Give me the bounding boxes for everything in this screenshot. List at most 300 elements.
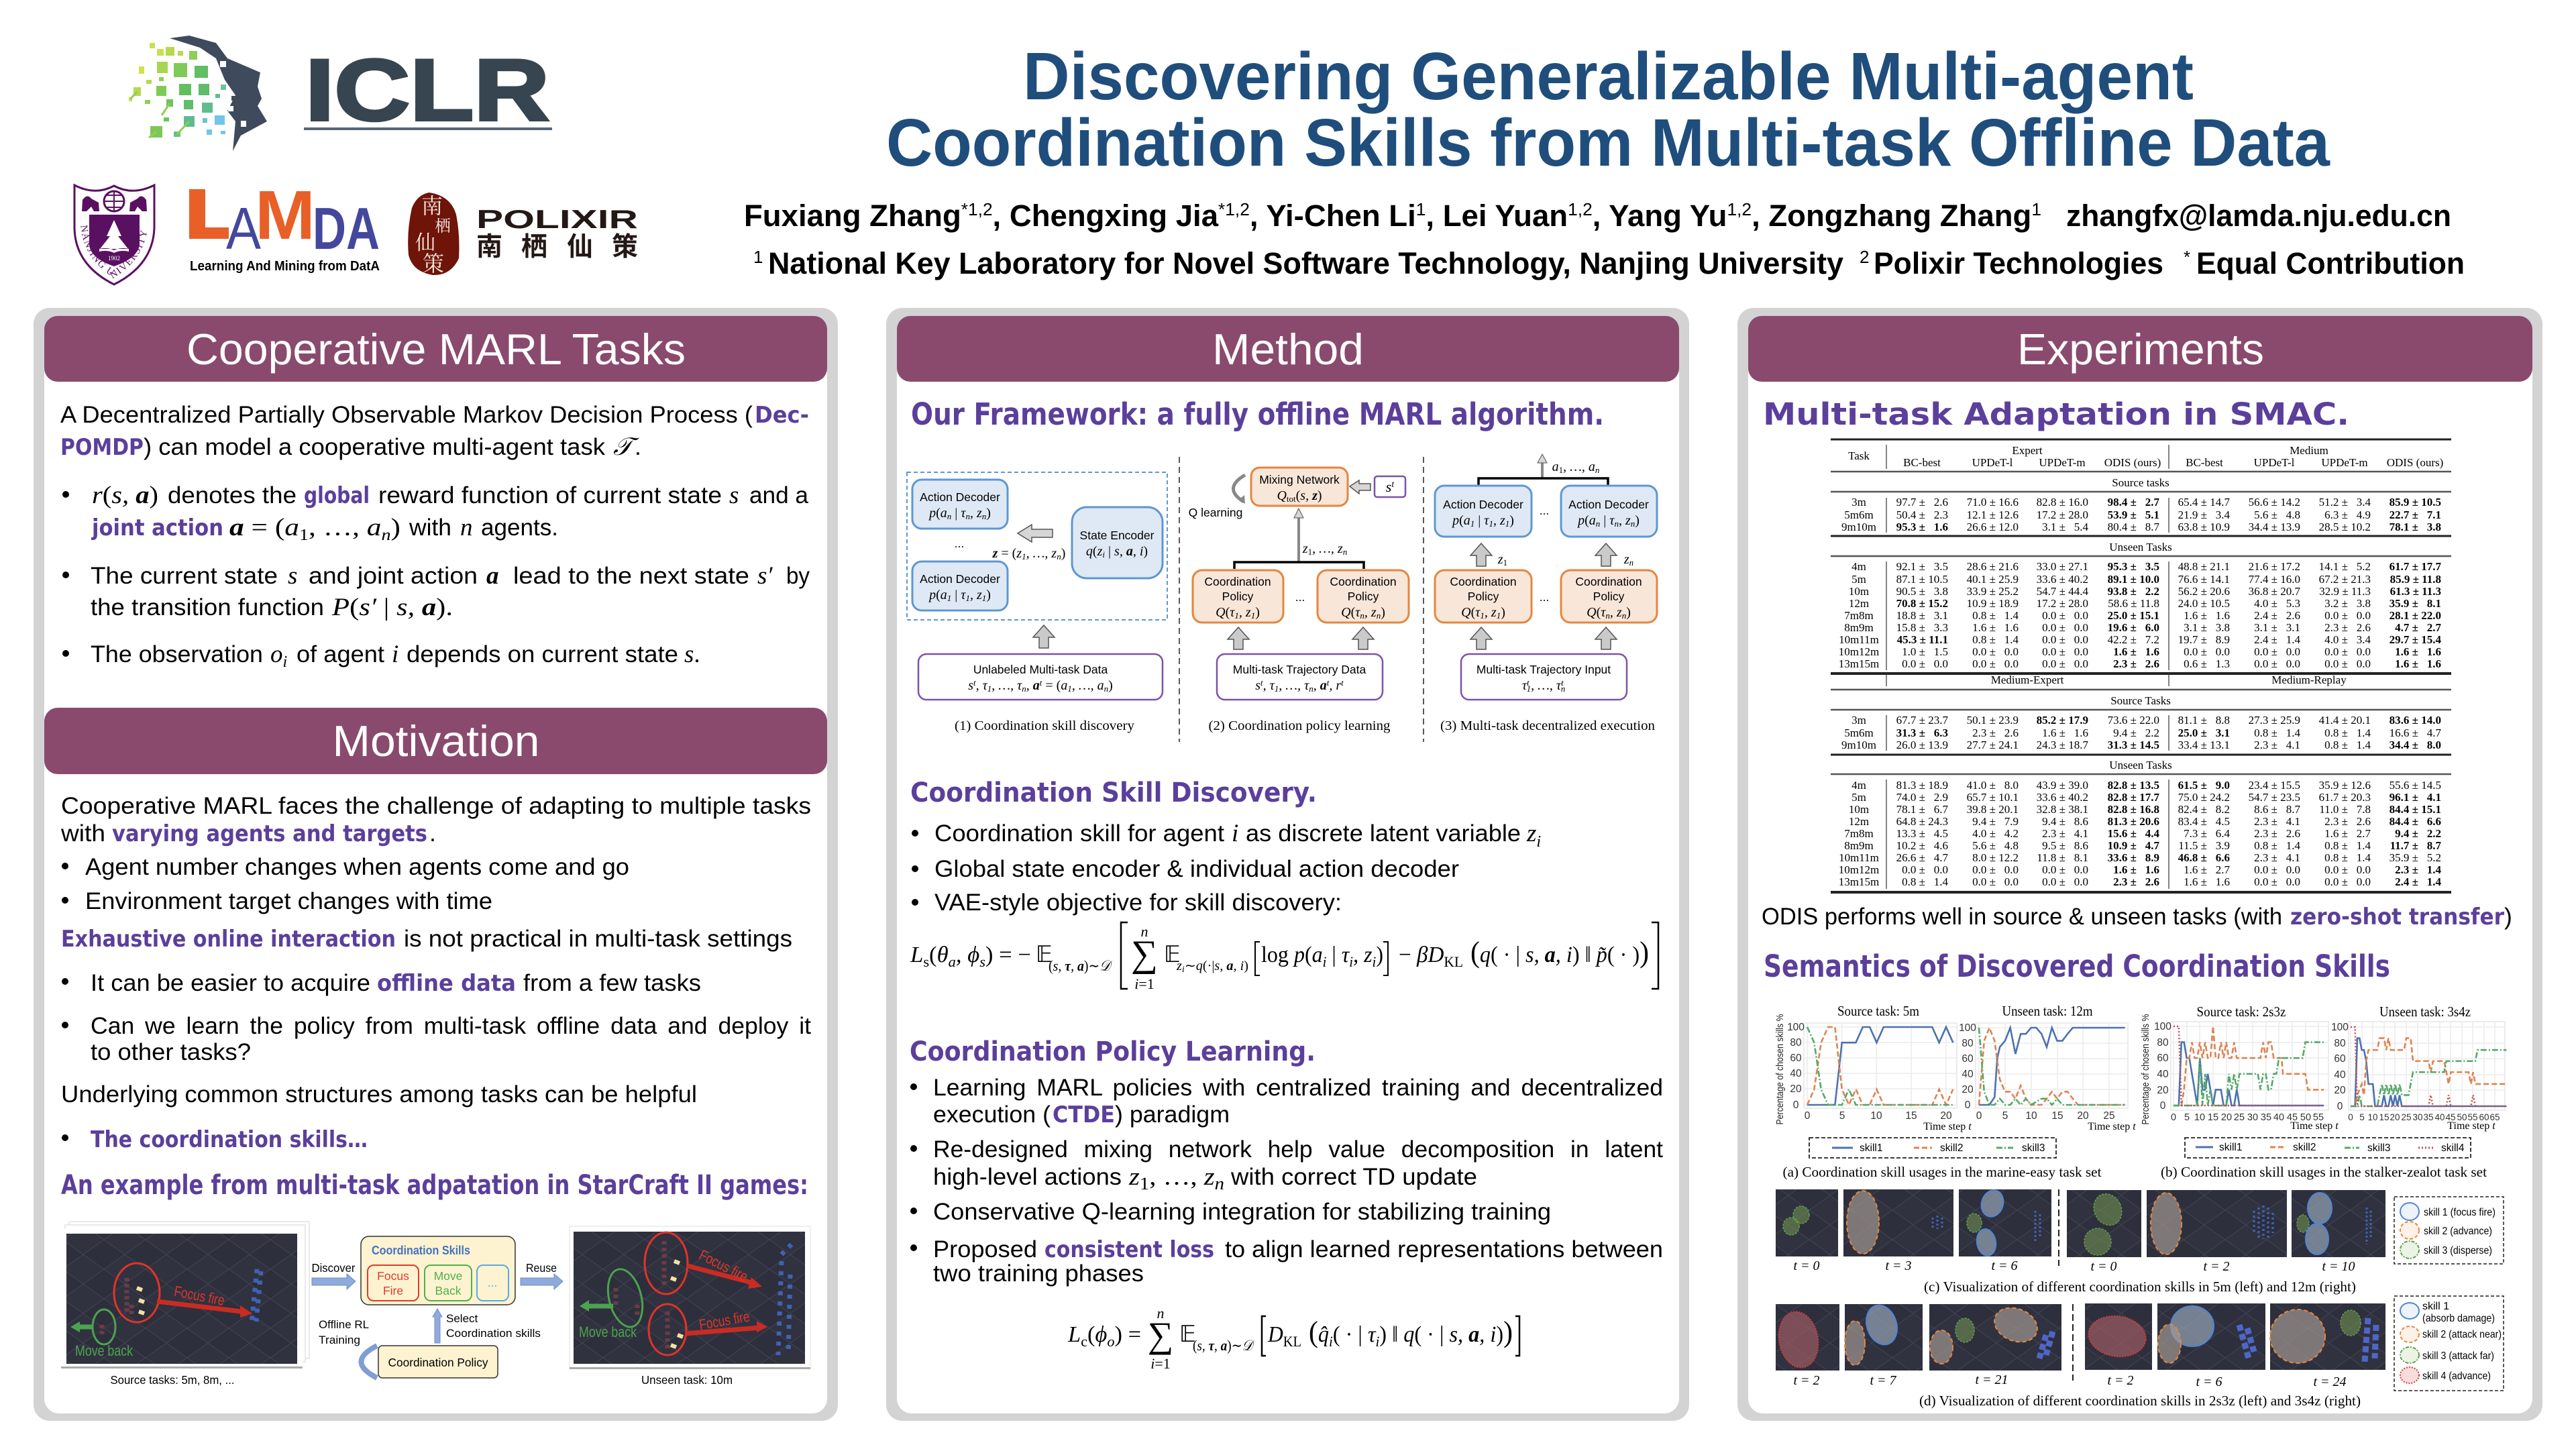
plot: unseen task 3s4z: 15 (2379, 1112, 2390, 1122)
plot: unseen task 3s4z: Time step t (2447, 1120, 2496, 1132)
subheading: SMAC adaptation: Multi-task Adaptation in SMAC. (1763, 396, 2349, 432)
formula: consistent loss (1067, 1305, 1519, 1372)
stage 3: decentralized execution: z (1624, 552, 1629, 567)
stage 1: coordination skill discovery: a (1061, 678, 1067, 693)
stage 2: coordination policy learning: , (1313, 678, 1320, 693)
table: SMAC results: 26.6 ± 4.7 (1896, 851, 1948, 864)
table: SMAC results: 10.9 ± 4.7 (2108, 839, 2159, 852)
logo: LAMDA: DA (313, 195, 380, 262)
text block: transition bullet: and joint action (309, 562, 478, 589)
table: SMAC results: 0.8 ± 1.4 (1972, 633, 2019, 646)
table: SMAC results: 1.6 ± 1.6 (2042, 727, 2088, 739)
table: SMAC results: 33.9 ± 25.2 (1967, 585, 2019, 598)
authors: *1,2 (1218, 199, 1250, 219)
table: SMAC results: 33.6 ± 40.2 (2037, 791, 2088, 804)
plot: source task 5m: Time step t (1923, 1121, 1972, 1132)
label: reuse arrow: Reuse (526, 1261, 557, 1275)
authors (744, 199, 2451, 233)
table: SMAC results: 1.0 ± 1.5 (1902, 645, 1948, 658)
legend: focus fire, advance, disperse: skill 1 (focus fire) (2424, 1207, 2496, 1218)
label: discover arrow: Discover (311, 1261, 356, 1275)
table: SMAC results: 70.8 ± 15.2 (1896, 597, 1948, 610)
stage 3: decentralized execution: 1 (1503, 557, 1507, 568)
stage 1: coordination skill discovery: n (1104, 684, 1108, 694)
plot: unseen task 3s4z: 20 (2390, 1112, 2400, 1122)
legend: stalker-zealot skills: skill4 (2441, 1142, 2465, 1154)
stage 2: coordination policy learning: ) (1255, 605, 1260, 620)
table: SMAC results: 8.0 ± 12.2 (1972, 851, 2019, 864)
stage 3: decentralized execution: ) (1626, 605, 1631, 620)
table: SMAC results: 42.2 ± 7.2 (2108, 633, 2159, 646)
screenshot: source tasks: Move back (75, 1342, 133, 1359)
table: SMAC results: 9.4 ± 2.2 (2395, 827, 2441, 840)
table: SMAC results: 28.6 ± 21.6 (1967, 560, 2019, 573)
table: SMAC results (1831, 439, 2451, 892)
table: SMAC results: 64.8 ± 24.3 (1896, 815, 1948, 828)
table: SMAC results: 81.1 ± 8.8 (2178, 714, 2230, 727)
formula: skill discovery objective: i=1 (1134, 975, 1155, 992)
plot: unseen task 12m: Unseen task: 12m (2002, 1003, 2093, 1019)
table: SMAC results: Unseen Tasks (2109, 759, 2172, 771)
stage 2: coordination policy learning: ( (1296, 488, 1301, 503)
stage 1: coordination skill discovery: 1 (987, 684, 991, 694)
caption: figure c: (c) Visualization of different coordination skills in 5m (left) and 12m (right) (1924, 1279, 2356, 1295)
legend: absorb damage, attack near, attack far, advance: skill 4 (advance) (2422, 1371, 2491, 1382)
plot: unseen task 12m: 40 (1962, 1069, 1974, 1080)
stage 3: decentralized execution: Action Decoder (1568, 498, 1649, 511)
text block: observation bullet: i (283, 653, 287, 671)
table: SMAC results: 2.4 ± 1.4 (2395, 875, 2441, 888)
table: SMAC results: 82.8 ± 13.5 (2108, 779, 2159, 792)
logo: LAMDA (189, 176, 380, 274)
stage 3: decentralized execution: a (1552, 460, 1559, 474)
formula: consistent loss: o (1107, 1333, 1115, 1350)
plot: unseen task 3s4z: 35 (2423, 1112, 2434, 1122)
formula: skill discovery objective: i (1323, 953, 1326, 970)
table: SMAC results: 80.4 ± 8.7 (2108, 521, 2159, 533)
plot: unseen task 3s4z: 80 (2334, 1038, 2346, 1049)
heading: Motivation: Motivation (333, 716, 539, 765)
text block: motivation challenge: with (60, 820, 105, 847)
table: SMAC results: 25.0 ± 3.1 (2178, 727, 2230, 739)
icon: ICLR head silhouette (170, 36, 267, 151)
table: SMAC results: 61.7 ± 20.3 (2319, 791, 2371, 804)
plot: unseen task 3s4z: 20 (2334, 1085, 2346, 1096)
table: SMAC results: 2.3 ± 2.6 (1972, 727, 2019, 739)
text block: reward bullet: n (460, 514, 472, 541)
text block: motivation challenge (60, 792, 811, 914)
stage 2: coordination policy learning: t (1341, 678, 1344, 688)
formula: skill discovery objective: i (1349, 953, 1353, 970)
formula: skill discovery objective: (s, τ, a)∼𝒟 (1049, 957, 1113, 974)
table: SMAC results: 9.4 ± 8.6 (2042, 815, 2088, 828)
stage 2: coordination policy learning: s (1386, 478, 1391, 495)
table: SMAC results: 5.6 ± 4.8 (2254, 508, 2300, 521)
formula: skill discovery objective: τ (1342, 943, 1350, 967)
table: SMAC results: 97.7 ± 2.6 (1896, 496, 1948, 508)
authors: , Chengxing Jia (993, 199, 1219, 233)
stage 1: coordination skill discovery: z = (z (993, 546, 1022, 561)
table: SMAC results: 33.6 ± 40.2 (2037, 573, 2088, 586)
box: coordination policy: Coordination Policy (388, 1356, 488, 1369)
table: SMAC results: 3m (1851, 496, 1866, 508)
stage 2: coordination policy learning: Coordination (1204, 575, 1271, 588)
table: SMAC results: 34.4 ± 13.9 (2249, 521, 2300, 533)
table: SMAC results: 76.6 ± 14.1 (2178, 573, 2230, 586)
plot: source task 2s3z: 80 (2157, 1037, 2169, 1049)
table: SMAC results: 9.4 ± 7.9 (1972, 815, 2019, 828)
stage 1: coordination skill discovery: , τ (976, 678, 988, 693)
table: SMAC results: 74.0 ± 2.9 (1896, 791, 1948, 804)
table: SMAC results: 82.4 ± 8.2 (2178, 803, 2230, 816)
table: SMAC results: Source Tasks (2110, 694, 2171, 707)
plot: unseen task 12m: Time step t (2088, 1121, 2136, 1132)
stage 1: coordination skill discovery: p(a (929, 588, 947, 602)
text block: observation bullet: i (392, 641, 398, 668)
table: SMAC results: Medium-Replay (2271, 674, 2347, 686)
table: SMAC results: 5m (1851, 573, 1866, 586)
table: SMAC results: 31.3 ± 14.5 (2108, 739, 2159, 751)
table: SMAC results: 82.8 ± 16.0 (2037, 496, 2088, 508)
box: coordination skills: Move (434, 1269, 462, 1283)
table: SMAC results: 18.8 ± 3.1 (1896, 609, 1948, 622)
table: SMAC results: 4.0 ± 4.2 (1972, 827, 2019, 840)
text block: policy learning bullets: z (1129, 1163, 1138, 1191)
table: SMAC results: 5m6m (1844, 727, 1874, 739)
formula: skill discovery objective: s (979, 953, 985, 970)
formula: consistent loss: i (1329, 1333, 1333, 1350)
table: SMAC results: 2.3 ± 2.6 (2324, 815, 2371, 828)
affiliations: 2 (1860, 247, 1869, 267)
table: SMAC results: 6.3 ± 4.9 (2324, 508, 2371, 521)
text block: observation bullet: s. (684, 641, 700, 668)
table: SMAC results: 10m12m (1839, 863, 1879, 876)
formula: skill discovery objective: , z (1353, 943, 1373, 967)
formula: consistent loss: D (1268, 1322, 1285, 1347)
text block: policy learning bullets: execution ( (933, 1101, 1051, 1128)
stage 3: decentralized execution: 1 (1497, 610, 1501, 621)
stage 2: coordination policy learning: t (1260, 678, 1263, 688)
chart: stalker-zealot skill usage: Percentage of chosen skills % (2140, 1014, 2151, 1124)
text block: ODIS result: zero-shot transfer (2290, 904, 2504, 930)
text block: Dec-POMDP definition: ) can model a cooperative multi-agent task (144, 433, 605, 460)
subheading: coordination skill discovery: Coordination Skill Discovery. (910, 777, 1317, 808)
table: SMAC results: 33.4 ± 13.1 (2178, 739, 2230, 751)
table: SMAC results: 0.0 ± 0.0 (2042, 657, 2088, 670)
figure: framework diagram (907, 454, 1657, 742)
authors: 1 (1416, 199, 1426, 219)
panel: Method (886, 308, 1689, 1421)
plot: unseen task 3s4z (2331, 1004, 2506, 1132)
heading: Method: Method (1212, 325, 1364, 374)
stage 2: coordination policy learning: Q(τ (1216, 605, 1234, 620)
table: SMAC results: 29.7 ± 15.4 (2390, 633, 2441, 646)
plot: unseen task 3s4z: Unseen task: 3s4z (2379, 1004, 2471, 1020)
plot: source task 5m: 80 (1790, 1037, 1802, 1049)
table: SMAC results: ODIS (ours) (2104, 456, 2161, 469)
logo: Nanjing University crest: NANJING UNIVERSITY (80, 225, 147, 279)
figure: StarCraft skill example (61, 1222, 810, 1387)
stage 1: coordination skill discovery: Unlabeled Multi-task Data (973, 663, 1108, 676)
table: SMAC results: 61.3 ± 11.3 (2390, 585, 2441, 598)
logo: Polixir: 仙 (567, 226, 593, 264)
table: SMAC results: 21.9 ± 3.4 (2178, 508, 2230, 521)
plot: source task 2s3z: 0 (2160, 1100, 2166, 1112)
table: SMAC results: 75.0 ± 24.2 (2178, 791, 2230, 804)
text block: policy learning bullets: Re-designed mixing network help value decomposition in latent (933, 1136, 1663, 1163)
label: offline RL training: Offline RL (319, 1318, 369, 1331)
plot: unseen task 3s4z: 65 (2489, 1112, 2500, 1122)
table: SMAC results: 81.3 ± 18.9 (1896, 779, 1948, 792)
heading: Motivation (44, 708, 827, 774)
panel: Experiments (1737, 308, 2542, 1421)
plot: source task 2s3z: 5 (2184, 1112, 2190, 1123)
table: SMAC results: 54.7 ± 23.5 (2249, 791, 2300, 804)
table: SMAC results: 95.3 ± 3.5 (2108, 560, 2159, 573)
text block: reward bullet: a (367, 514, 379, 541)
plot: source task 2s3z: 20 (2221, 1112, 2232, 1123)
table: SMAC results: 35.9 ± 8.1 (2390, 597, 2441, 610)
subheading: coordination policy learning: Coordination Policy Learning. (910, 1036, 1316, 1067)
stage 1: coordination skill discovery: , …, z (1026, 546, 1057, 561)
text block: offline data argument: offline data (377, 970, 516, 997)
legend: absorb damage, attack near, attack far, advance: skill 2 (attack near) (2422, 1329, 2502, 1340)
plot: source task 2s3z: 100 (2154, 1021, 2171, 1032)
table: SMAC results: 0.8 ± 1.4 (1972, 609, 2019, 622)
text block: reward bullet: agents. (481, 514, 558, 541)
stage 3: decentralized execution: 1 (1527, 684, 1531, 694)
legend: stalker-zealot skills: skill3 (2367, 1142, 2390, 1154)
table: SMAC results: 0.0 ± 0.0 (2324, 645, 2371, 658)
heading: Cooperative MARL Tasks: Cooperative MARL Tasks (186, 325, 686, 374)
table: SMAC results: 13m15m (1839, 875, 1879, 888)
stage 3: decentralized execution: n (1631, 519, 1635, 529)
table: SMAC results: Task (1848, 449, 1870, 462)
formula: consistent loss: c (1081, 1333, 1087, 1350)
stage 1: coordination skill discovery: s, a, i) (1114, 544, 1148, 559)
table: SMAC results: 82.8 ± 16.8 (2108, 803, 2159, 816)
text block: reward bullet: with (409, 514, 451, 541)
table: SMAC results: 10.2 ± 4.6 (1896, 839, 1948, 852)
table: SMAC results: 51.2 ± 3.4 (2319, 496, 2371, 508)
figure: skill visualization 2s3z and 3s4z: t = 2 (1793, 1373, 1820, 1388)
text block: offline data argument: from a few tasks (523, 969, 701, 996)
screenshot: source tasks: Focus fire (173, 1283, 226, 1309)
text block: policy learning bullets: high-level actions (933, 1163, 1122, 1190)
plot: source task 2s3z: 30 (2247, 1112, 2258, 1123)
stage 2: coordination policy learning: 1 (1251, 610, 1255, 621)
table: SMAC results: 14.1 ± 5.2 (2319, 560, 2371, 573)
stage 3: decentralized execution: | (1600, 513, 1609, 528)
logo: LAMDA: Learning And Mining from DatA (190, 259, 380, 274)
stage 1: coordination skill discovery: s (968, 678, 973, 693)
text block: Dec-POMDP definition (60, 401, 809, 461)
table: SMAC results: 2.3 ± 4.1 (2254, 739, 2300, 751)
authors: , Yang Yu (1593, 199, 1727, 233)
stage 1: coordination skill discovery: 1 (982, 593, 986, 603)
logo: Polixir (408, 189, 638, 278)
table: SMAC results: 55.6 ± 14.5 (2390, 779, 2441, 792)
table: SMAC results: 48.8 ± 21.1 (2178, 560, 2230, 573)
table: SMAC results: 33.6 ± 8.9 (2108, 851, 2159, 864)
stage 3: decentralized execution: 1 (1480, 610, 1485, 621)
stage 1: coordination skill discovery: t (973, 678, 976, 688)
figure: skill visualization 2s3z and 3s4z: t = 21 (1975, 1373, 2008, 1387)
figure: skill visualization 2s3z and 3s4z: t = 7 (1870, 1373, 1897, 1388)
table: SMAC results: 32.8 ± 38.1 (2037, 803, 2088, 816)
stage 1: coordination skill discovery: n (982, 511, 986, 521)
text block: offline data argument: is not practical in multi-task settings (404, 925, 792, 952)
plot: source task 2s3z: Source task: 2s3z (2196, 1004, 2286, 1020)
text block: offline data argument: Can we learn the policy from multi-task offline data and deploy it (91, 1012, 811, 1039)
table: SMAC results: 61.7 ± 17.7 (2390, 560, 2441, 573)
logo: Polixir: 南 (476, 226, 502, 264)
figure: skill visualization 2s3z and 3s4z: t = 24 (2313, 1375, 2347, 1389)
table: SMAC results: 92.1 ± 3.5 (1896, 560, 1948, 573)
text block: transition bullet: s (288, 562, 297, 590)
text block: reward bullet: s (729, 482, 739, 509)
logo: Polixir: 栖 (435, 213, 451, 236)
table: SMAC results: 0.0 ± 0.0 (2042, 621, 2088, 634)
stage 2: coordination policy learning: 1 (1275, 684, 1279, 694)
table: SMAC results: 0.8 ± 1.4 (2324, 839, 2371, 852)
stage 1: coordination skill discovery: t (1040, 678, 1042, 688)
table: SMAC results: 85.2 ± 17.9 (2037, 714, 2088, 727)
text block: coordination skills (61, 1081, 697, 1153)
formula: skill discovery objective: n (1140, 923, 1148, 940)
table: SMAC results: 2.3 ± 4.1 (2254, 851, 2300, 864)
stage 1: coordination skill discovery: (1) Coordination skill discovery (955, 718, 1134, 733)
stage 2: coordination policy learning: ... (1295, 590, 1305, 604)
authors: zhangfx@lamda.nju.edu.cn (2066, 199, 2451, 233)
stage 1: coordination skill discovery: , z (970, 588, 982, 602)
formula: consistent loss: ) = (1115, 1322, 1141, 1347)
stage 1: coordination skill discovery: ) (1108, 678, 1113, 693)
stage 3: decentralized execution: , …, τ (1531, 678, 1562, 693)
stage 1: coordination skill discovery: i (1102, 549, 1105, 559)
stage 3: decentralized execution: n (1561, 684, 1565, 694)
plot: source task 2s3z: 20 (2157, 1085, 2169, 1096)
text block: policy learning bullets: consistent loss (1044, 1236, 1214, 1263)
stage 1: coordination skill discovery: n (947, 511, 951, 521)
plot: unseen task 12m: 20 (1962, 1084, 1974, 1095)
table: SMAC results: 13m15m (1839, 657, 1879, 670)
table: SMAC results: UPDeT-m (2321, 456, 2368, 469)
plot: source task 5m: 60 (1790, 1053, 1802, 1064)
caption: unseen task: Unseen task: 10m (641, 1373, 733, 1387)
stage 3: decentralized execution: ) (1509, 513, 1514, 528)
table: SMAC results: 9m10m (1841, 521, 1876, 533)
table: SMAC results: 46.8 ± 6.6 (2178, 851, 2230, 864)
text block: reward bullet: global (304, 482, 370, 509)
stage 3: decentralized execution: , z (1610, 605, 1622, 620)
plot: source task 2s3z: 0 (2171, 1112, 2176, 1123)
stage 1: coordination skill discovery: 1 (1022, 551, 1026, 561)
logo: LAMDA: A (226, 195, 261, 262)
text block: transition bullet (62, 562, 810, 621)
table: SMAC results: 10m (1849, 585, 1869, 598)
legend: stalker-zealot skills (2185, 1138, 2471, 1158)
plot: source task 2s3z: 25 (2234, 1112, 2245, 1123)
table: SMAC results: 98.4 ± 2.7 (2108, 496, 2159, 508)
table: SMAC results: 11.8 ± 8.1 (2037, 851, 2088, 864)
stage 3: decentralized execution: n (1629, 557, 1633, 568)
text block: motivation challenge: . (429, 820, 436, 847)
stage 2: coordination policy learning: Coordination (1330, 575, 1397, 588)
stage 3: decentralized execution: ) (1635, 513, 1640, 528)
formula: consistent loss: i=1 (1150, 1355, 1171, 1372)
formula: consistent loss: ( · | (1333, 1322, 1368, 1347)
label: reuse arrow (521, 1261, 563, 1289)
table: SMAC results: BC-best (2186, 456, 2223, 469)
table: SMAC results: 73.6 ± 22.0 (2108, 714, 2159, 727)
stage 2: coordination policy learning: , …, τ (1279, 678, 1309, 693)
affiliations: Polixir Technologies (1874, 246, 2163, 280)
legend: absorb damage, attack near, attack far, advance: skill 3 (attack far) (2422, 1350, 2494, 1362)
plot: unseen task 12m: 60 (1962, 1053, 1974, 1065)
table: SMAC results: 53.9 ± 5.1 (2108, 508, 2159, 521)
stage 2: coordination policy learning: , τ (1263, 678, 1275, 693)
stage 3: decentralized execution: t (1527, 678, 1529, 688)
authors: 1,2 (1727, 199, 1752, 219)
plot: unseen task 12m: 25 (2103, 1110, 2115, 1122)
table: SMAC results: 0.0 ± 0.0 (2324, 863, 2371, 876)
formula: skill discovery objective: ( (929, 943, 937, 967)
table: SMAC results: 0.0 ± 0.0 (2254, 863, 2300, 876)
formula: consistent loss: ) ‖ (1379, 1322, 1403, 1347)
affiliations (753, 246, 2465, 280)
table: SMAC results: 32.9 ± 11.3 (2319, 585, 2371, 598)
table: SMAC results: 1.6 ± 1.6 (2113, 863, 2159, 876)
stage 2: coordination policy learning: t (1391, 480, 1395, 490)
affiliations: Equal Contribution (2196, 246, 2465, 280)
table: SMAC results: 56.2 ± 20.6 (2178, 585, 2230, 598)
table: SMAC results: 63.8 ± 10.9 (2178, 521, 2230, 533)
label: select coordination skills: Coordination skills (446, 1327, 541, 1340)
figure: skill visualization 5m and 12m: t = 2 (2203, 1259, 2230, 1274)
formula: consistent loss: (s, τ, a)∼𝒟 (1193, 1337, 1255, 1354)
plot: unseen task 3s4z: 10 (2367, 1112, 2378, 1122)
table: SMAC results: 19.7 ± 8.9 (2178, 633, 2230, 646)
formula: skill discovery objective: KL (1444, 953, 1463, 970)
table: SMAC results: 43.9 ± 39.0 (2037, 779, 2088, 792)
heading: Method (897, 316, 1679, 382)
plot: unseen task 12m: 5 (2002, 1110, 2008, 1122)
logo: Polixir: 南 (421, 189, 443, 220)
table: SMAC results: 12m (1849, 597, 1869, 610)
text block: reward bullet: denotes the (168, 482, 297, 508)
plot: unseen task 3s4z: 50 (2457, 1112, 2467, 1122)
stage 3: decentralized execution: ... (1540, 504, 1549, 517)
table: SMAC results: 3.2 ± 3.8 (2324, 597, 2371, 610)
table: SMAC results: 26.0 ± 13.9 (1896, 739, 1948, 751)
plot: source task 2s3z: 35 (2261, 1112, 2271, 1123)
plot: source task 5m: 40 (1790, 1068, 1802, 1079)
table: SMAC results: 78.1 ± 3.8 (2390, 521, 2441, 533)
text block: policy learning bullets: with correct TD update (1230, 1163, 1477, 1190)
label: offline RL training (319, 1318, 377, 1378)
text block: ODIS result: ODIS performs well in source & unseen tasks (with (1762, 903, 2282, 930)
stage 3: decentralized execution: , z (1485, 605, 1497, 620)
stage 1: coordination skill discovery: 1 (1067, 684, 1072, 694)
text block: Dec-POMDP definition: POMDP (60, 434, 144, 461)
stage 2: coordination policy learning: a (1320, 678, 1327, 693)
table: SMAC results: 7m8m (1844, 609, 1874, 622)
legend: marine-easy skills (1809, 1138, 2056, 1158)
plot: source task 5m: Source task: 5m (1837, 1003, 1919, 1019)
plot: source task 5m: 10 (1870, 1110, 1882, 1122)
text block: offline data argument: It can be easier to acquire (91, 969, 370, 996)
